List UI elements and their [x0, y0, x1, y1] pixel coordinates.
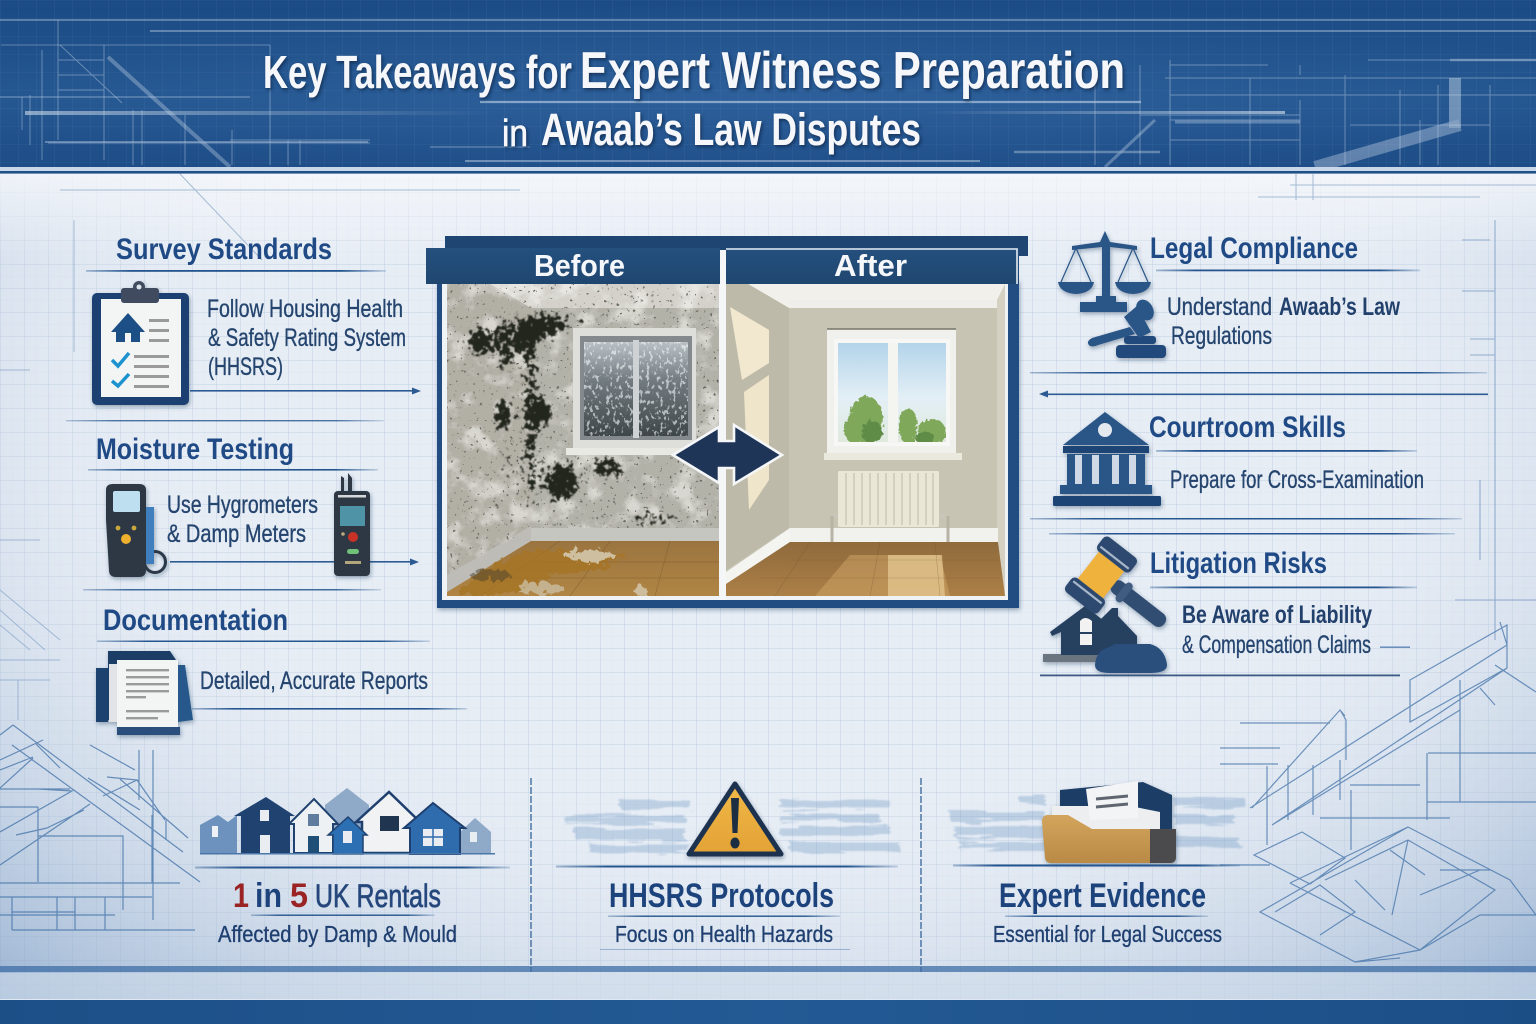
title: Key Takeaways for: [263, 46, 572, 98]
text: legal body: Understand: [1167, 293, 1272, 321]
statistic: 1 in 5 UK rentals: [233, 877, 441, 915]
text: legal body: [1167, 293, 1400, 350]
icon: document stack: [96, 651, 193, 735]
statistic: 1 in 5 UK rentals: in: [255, 877, 282, 915]
header lower edge: [0, 167, 1536, 260]
title: Expert Witness Preparation: [580, 42, 1125, 100]
icon: damp meter: [334, 473, 370, 576]
icon: gavel and house: [1043, 534, 1186, 673]
text: survey body: Follow Housing Health: [207, 295, 403, 323]
mould flakes on floor: [455, 550, 647, 596]
text: litigation body: [1182, 601, 1372, 659]
before window: [566, 328, 696, 455]
blueprint sketch: bottom right: [1220, 622, 1536, 962]
icon: row of houses: [200, 788, 495, 854]
arrow: moisture to photo: [83, 469, 419, 590]
title: in: [502, 113, 528, 155]
after window: [824, 329, 962, 460]
heading: legal compliance: Legal Compliance: [1150, 232, 1358, 265]
header: before: [426, 248, 720, 284]
heading: survey standards: Survey Standards: [116, 233, 332, 266]
text: courtroom body: Prepare for Cross-Examination: [1170, 466, 1424, 494]
text: legal body: Awaab’s Law: [1279, 293, 1400, 321]
blueprint sketch: left mid: [0, 220, 74, 720]
panel: before and after comparison: [426, 236, 1028, 608]
decorative streaks behind folder: [950, 795, 1245, 850]
text: survey body: & Safety Rating System: [208, 324, 406, 352]
panel: rentals statistic: [195, 788, 510, 947]
icon: scales and gavel: [1058, 231, 1166, 358]
text: litigation body: Be Aware of Liability: [1182, 601, 1372, 629]
text: moisture body: & Damp Meters: [167, 520, 306, 548]
heading: courtroom skills: Courtroom Skills: [1149, 411, 1346, 444]
arrow: survey to photo: [66, 270, 421, 421]
text: survey body: [207, 295, 406, 381]
arrow: before-after double arrow: [673, 425, 782, 484]
icon: folder: [1042, 781, 1176, 863]
panel: litigation risks: [1040, 534, 1417, 676]
text: moisture body: [167, 491, 318, 548]
icon: hygrometer: [106, 484, 166, 577]
statistic: 1 in 5 UK rentals: 1: [233, 877, 249, 915]
arrow: back to photo: [1039, 390, 1488, 398]
frame: [437, 236, 1028, 608]
panel: legal compliance: [1030, 231, 1487, 374]
text: rentals sub: Affected by Damp & Mould: [218, 921, 457, 947]
heading: HHSRS protocols: HHSRS Protocols: [609, 877, 834, 915]
header band: [0, 0, 1536, 167]
statistic: 1 in 5 UK rentals: 5: [290, 877, 308, 915]
heading: documentation: Documentation: [103, 604, 288, 637]
text: expert sub: Essential for Legal Success: [993, 921, 1222, 947]
heading: litigation risks: Litigation Risks: [1150, 547, 1327, 580]
panel: documentation: [96, 604, 467, 735]
bottom band: [0, 966, 1536, 1024]
photo: before, mouldy room: [447, 284, 719, 596]
title: Awaab’s Law Disputes: [541, 104, 921, 155]
divider: [719, 250, 726, 600]
photo: after, restored room: [726, 284, 1005, 596]
text: documentation body: Detailed, Accurate Reports: [200, 667, 428, 695]
text: survey body: (HHSRS): [208, 353, 283, 381]
radiator: [832, 471, 948, 542]
panel: survey standards: [66, 233, 421, 421]
statistic: 1 in 5 UK rentals: UK Rentals: [315, 878, 441, 914]
text: HHSRS sub: Focus on Health Hazards: [615, 921, 833, 947]
heading: expert evidence: Expert Evidence: [999, 877, 1206, 915]
header: after: [726, 248, 1019, 284]
header: before: Before: [534, 248, 625, 283]
bottom panel dividers: [531, 778, 921, 972]
blueprint sketch: right mid: [1455, 220, 1536, 640]
panel: courtroom skills: [1030, 411, 1462, 534]
panel: moisture testing: [83, 433, 419, 590]
icon: clipboard: [92, 281, 189, 405]
panel: HHSRS protocols: [556, 784, 900, 950]
decorative streaks behind warning: [565, 800, 900, 853]
text: litigation body: & Compensation Claims: [1182, 631, 1371, 659]
text: legal body: Regulations: [1171, 322, 1272, 350]
heading: moisture testing: Moisture Testing: [96, 433, 294, 466]
blueprint sketch: bottom left: [0, 725, 200, 930]
panel: expert evidence: [950, 781, 1245, 947]
icon: warning triangle: [689, 784, 781, 854]
text: moisture body: Use Hygrometers: [167, 491, 318, 519]
title: [263, 42, 1125, 155]
header: after: After: [834, 248, 907, 283]
icon: courthouse: [1053, 412, 1161, 506]
